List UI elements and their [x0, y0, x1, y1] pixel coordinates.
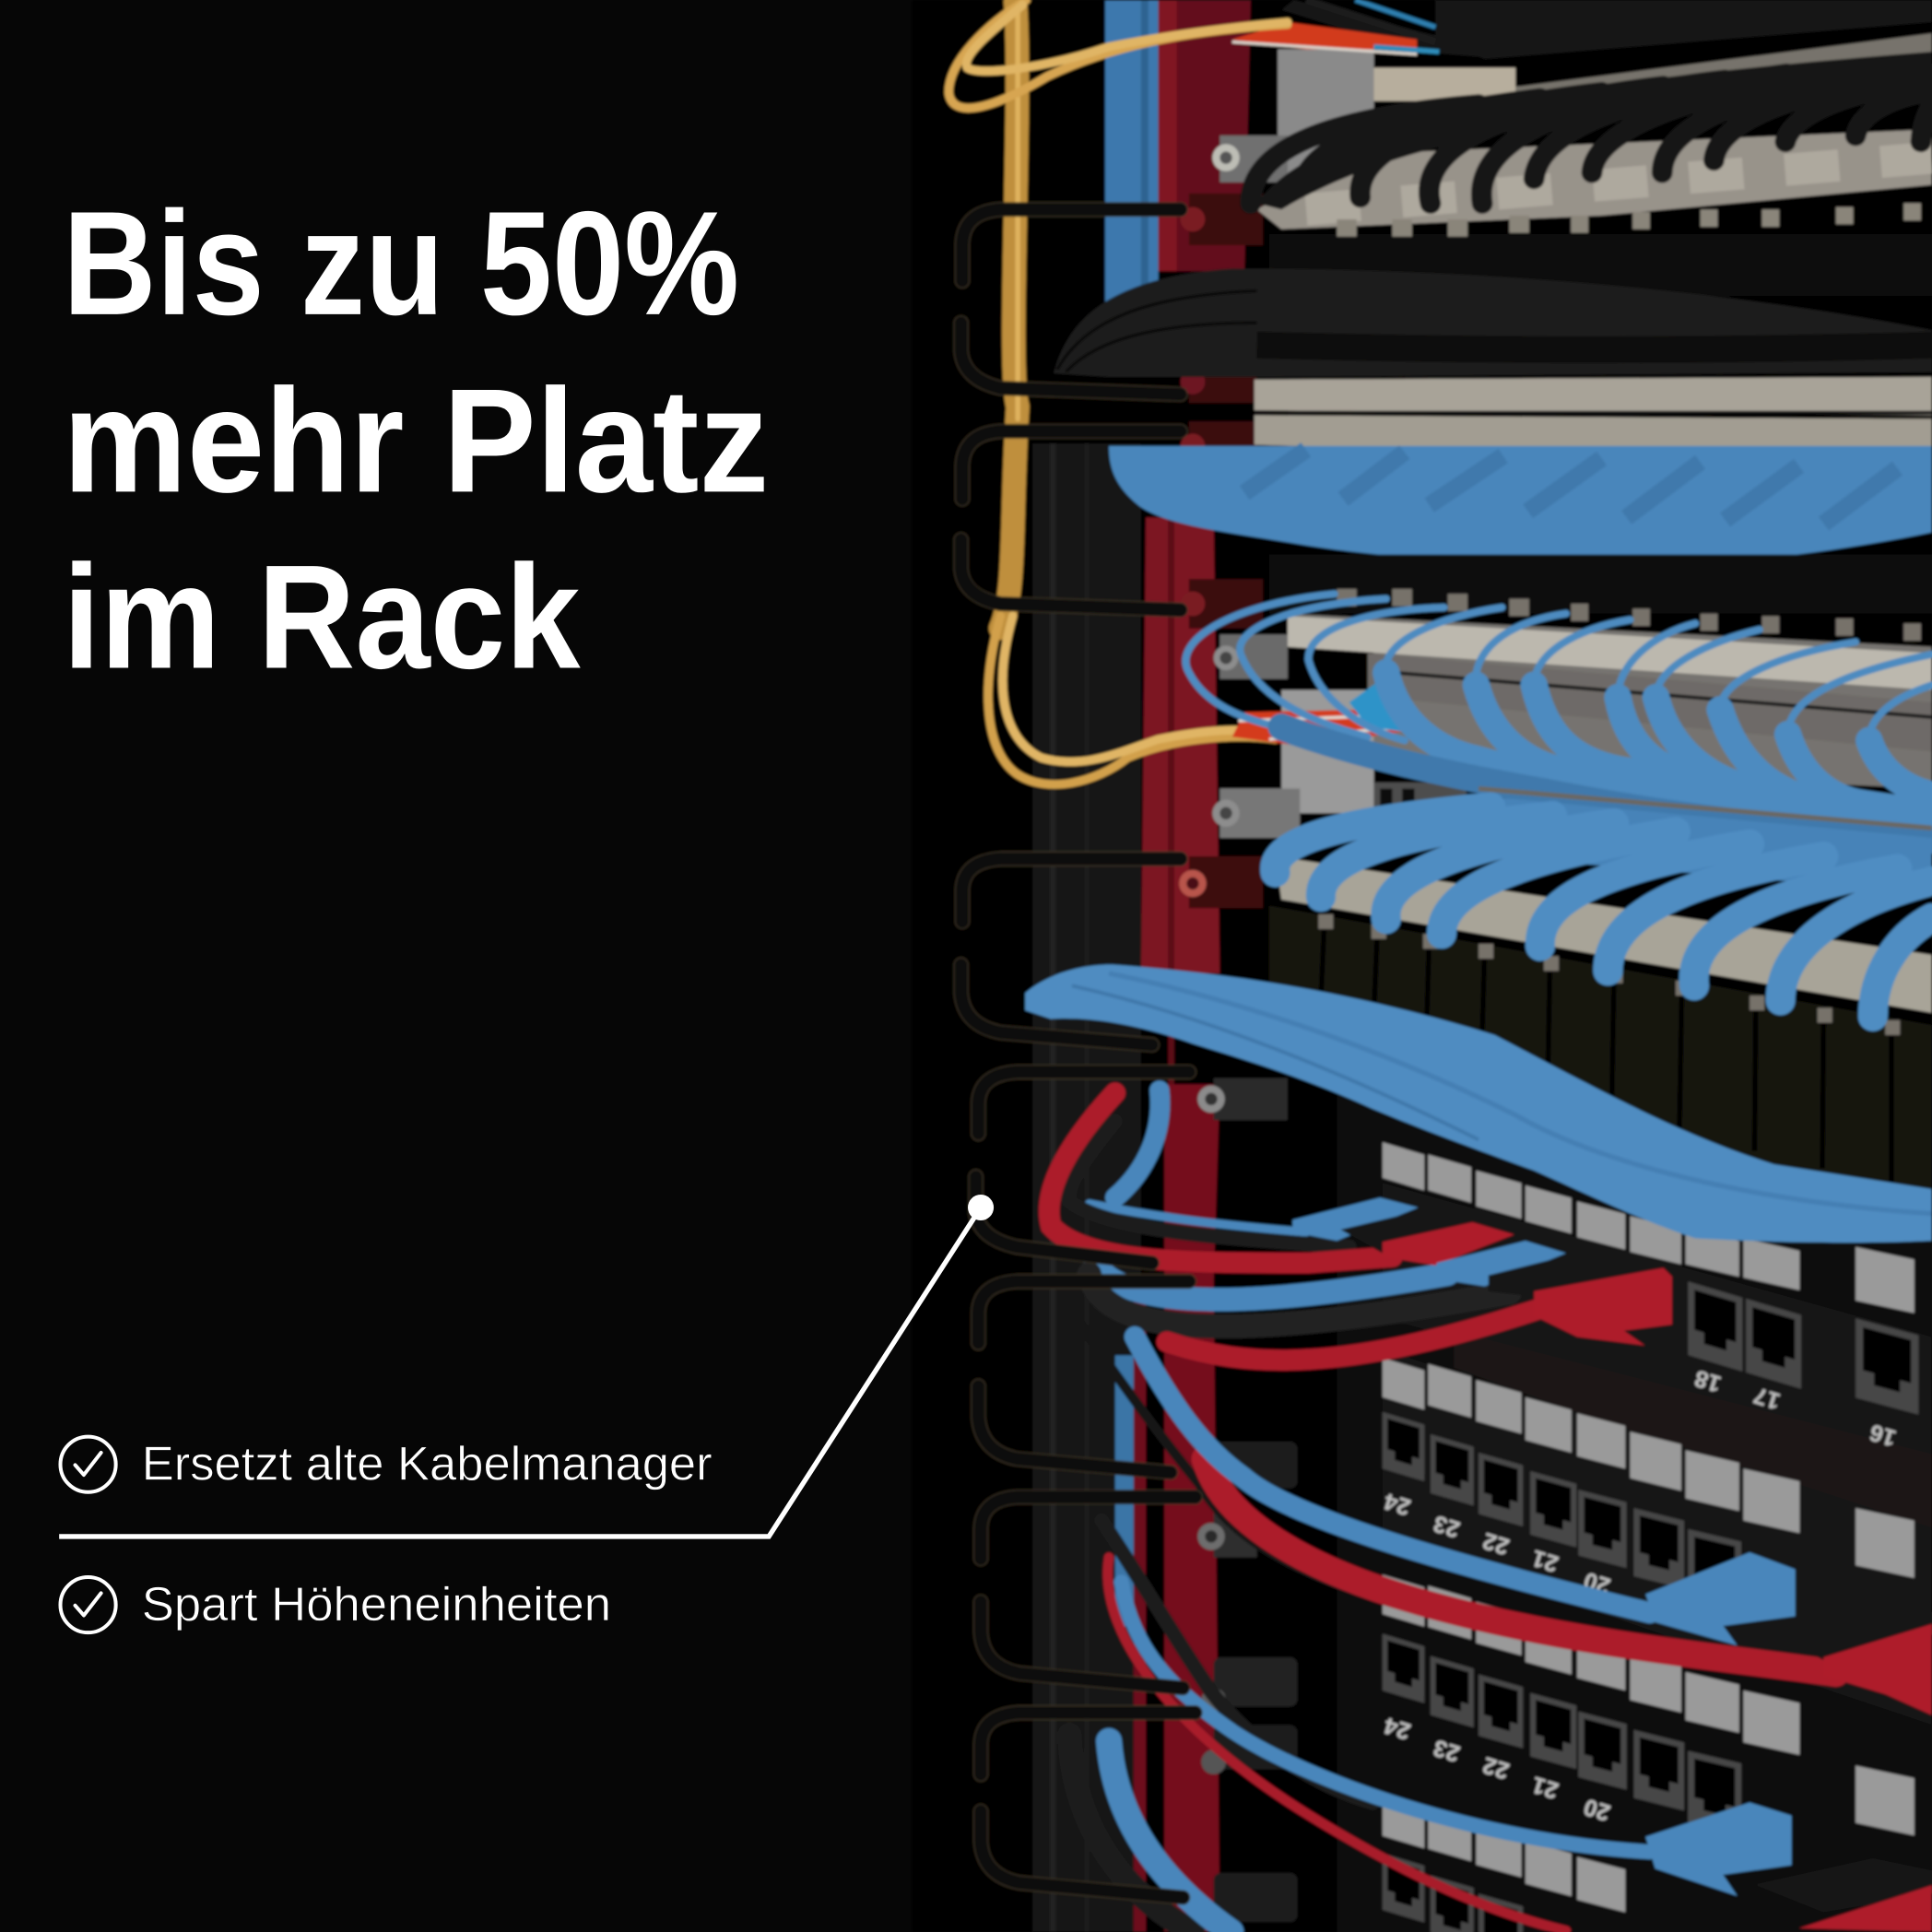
headline: Bis zu 50% — [63, 181, 739, 346]
mounting nuts — [1179, 135, 1300, 1922]
cable manager hooks — [961, 209, 1196, 1898]
headline — [63, 181, 769, 700]
red nuts — [1189, 194, 1263, 245]
feature: Spart Höheneinheiten — [61, 1577, 611, 1632]
port numbers: 18 — [1691, 1364, 1725, 1397]
top cable mass and connectors — [1232, 0, 1932, 101]
rear vertical cable bundles — [1032, 0, 1251, 1932]
blue patch lead fan middle — [1185, 594, 1932, 841]
port numbers: 23 — [1431, 1510, 1463, 1542]
port numbers: 17 — [1750, 1382, 1784, 1414]
grey rack plates — [1278, 49, 1373, 1932]
headline: mehr Platz — [63, 358, 769, 523]
port numbers: 22 — [1479, 1527, 1513, 1560]
blue cable bundle upper — [1109, 446, 1932, 567]
short patch leads and connectors — [1049, 1090, 1672, 1361]
icon: check circle — [61, 1577, 116, 1632]
red and white fibre connector — [1232, 680, 1442, 747]
port numbers — [1381, 1364, 1899, 1826]
lower rail and blue patch lead fan — [1275, 789, 1932, 1017]
port numbers: 20 — [1581, 1794, 1613, 1826]
port numbers: 21 — [1529, 1772, 1561, 1804]
port numbers: 22 — [1479, 1751, 1513, 1784]
middle rail — [1288, 614, 1932, 813]
port numbers: 24 — [1381, 1488, 1414, 1520]
feature text: Ersetzt alte Kabelmanager — [142, 1437, 713, 1490]
port numbers: 21 — [1529, 1545, 1561, 1577]
panel labels — [1383, 1142, 1914, 1913]
headline: im Rack — [63, 535, 581, 700]
upper rail and black patch leads — [1251, 52, 1932, 230]
long patch leads and connectors — [1069, 1317, 1932, 1932]
photo: server rack with patch panels and cables — [912, 0, 1932, 1932]
yellow fibre cables — [948, 0, 1288, 784]
callout leader line and dot — [59, 1195, 994, 1537]
dark tile row 1 — [1269, 204, 1932, 296]
feature: Ersetzt alte Kabelmanager — [61, 1437, 713, 1492]
port numbers: 23 — [1431, 1734, 1463, 1767]
big blue cable bundle — [1025, 965, 1932, 1243]
panel ports — [1383, 1281, 1918, 1932]
dark tile row 3 — [1269, 905, 1932, 1232]
port numbers: 20 — [1581, 1567, 1613, 1599]
black cable bundle — [1054, 268, 1932, 377]
icon: check circle — [61, 1437, 116, 1492]
panel bodies — [1383, 1183, 1932, 1932]
dark tile row 2 — [1269, 555, 1932, 641]
beige rails — [1255, 377, 1932, 464]
port numbers: 24 — [1381, 1712, 1414, 1744]
port numbers: 16 — [1867, 1419, 1899, 1451]
feature text: Spart Höheneinheiten — [142, 1578, 611, 1632]
